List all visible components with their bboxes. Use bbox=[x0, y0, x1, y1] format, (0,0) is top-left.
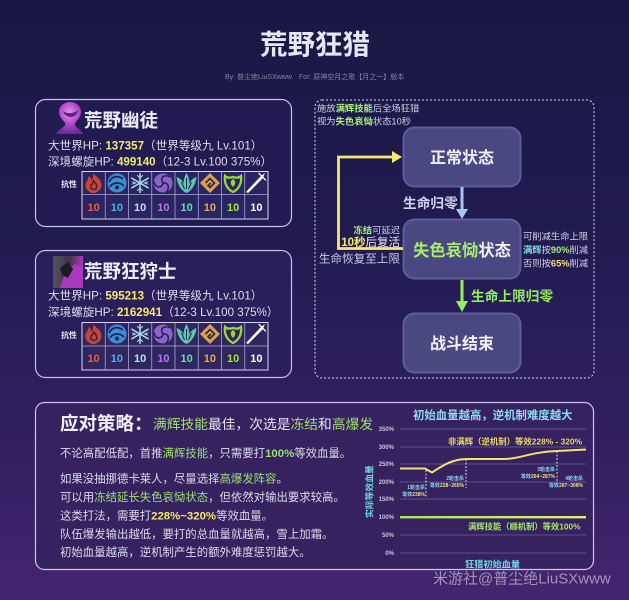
table: resistances bbox=[82, 322, 268, 370]
arrow: normal to despair bbox=[456, 187, 468, 219]
label: round 2: 2轮击杀 bbox=[446, 475, 464, 482]
heading: 应对策略: 应对策略： bbox=[60, 413, 153, 434]
resistance values: 10 bbox=[111, 353, 123, 365]
y axis ticks: 250% bbox=[379, 462, 395, 468]
panel: boss 荒野幽徒 bbox=[36, 100, 292, 226]
icon: pyro bbox=[85, 324, 102, 344]
label: 非满辉: 非满辉（逆机制）等效228% - 320% bbox=[448, 436, 583, 446]
resistance values: 10 bbox=[157, 353, 170, 365]
icon: electro bbox=[154, 324, 172, 344]
text: skill note: 施放满辉技能后全场狂猎 bbox=[317, 102, 419, 114]
y axis ticks: 150% bbox=[379, 497, 395, 503]
text: strategy paragraph: 可以用冻结延长失色哀恸状态，但依然对输出要求较高。 bbox=[60, 490, 345, 504]
label: round 2: 等效228~265% bbox=[430, 482, 465, 489]
y axis ticks bbox=[379, 427, 395, 557]
resistance values bbox=[87, 353, 263, 365]
label: round 4 bbox=[549, 475, 584, 489]
x axis label: 狂猎初始血量 bbox=[465, 558, 520, 570]
label: round 1: 等效238% bbox=[402, 491, 426, 498]
text: reduction notes: 可削减生命上限 bbox=[523, 230, 588, 242]
icon: physical bbox=[246, 324, 266, 344]
y axis ticks: 300% bbox=[379, 445, 395, 451]
icon: physical bbox=[246, 173, 266, 193]
y axis label: 实际等效血量 bbox=[364, 465, 374, 518]
resistance values: 10 bbox=[87, 202, 100, 214]
label: 生命上限归零: 生命上限归零 bbox=[471, 288, 553, 304]
resistance values: 10 bbox=[180, 202, 193, 214]
text: strategy paragraph: 如果没抽挪德卡莱人，尽量选择高爆发阵容。 bbox=[60, 472, 288, 486]
icon: 荒野狂狩士 portrait bbox=[53, 256, 83, 288]
box: 失色哀恸状态: 失色哀恸状态 bbox=[413, 241, 511, 260]
box: 战斗结束: 战斗结束 bbox=[430, 335, 494, 353]
resistance values: 10 bbox=[180, 353, 193, 365]
text: 深境螺旋HP: 深境螺旋HP: 2162941（12-3 Lv.100 375%） bbox=[48, 305, 279, 319]
y axis ticks: 100% bbox=[379, 515, 395, 521]
panel: state flow bbox=[315, 100, 594, 378]
icon: hydro bbox=[108, 174, 126, 192]
chart title: 初始血量越高，逆机制难度越大 bbox=[413, 408, 573, 422]
y axis ticks: 50% bbox=[382, 533, 395, 539]
icon: geo bbox=[200, 324, 220, 344]
box: 战斗结束 bbox=[404, 314, 520, 372]
text: strategy paragraph: 这类打法，需要打228%~320%等效血量。 bbox=[60, 508, 273, 522]
y axis ticks: 200% bbox=[379, 480, 395, 486]
resistance values: 10 bbox=[134, 202, 146, 214]
icon: cryo bbox=[132, 174, 148, 192]
resistance values: 10 bbox=[204, 353, 216, 365]
text: strategy paragraph bbox=[60, 472, 345, 559]
y axis ticks: 350% bbox=[379, 427, 395, 433]
label: round 2 bbox=[430, 475, 465, 489]
resistance values: 10 bbox=[134, 353, 146, 365]
resistance values: 10 bbox=[157, 202, 170, 214]
heading: 荒野幽徒: 荒野幽徒 bbox=[84, 110, 159, 131]
box: 正常状态 bbox=[404, 128, 520, 186]
label: 抗性: 抗性 bbox=[61, 330, 77, 340]
text: state note: 视为失色哀恸状态10秒 bbox=[317, 116, 411, 126]
box: 正常状态: 正常状态 bbox=[430, 148, 494, 167]
label: 抗性: 抗性 bbox=[61, 179, 77, 189]
line: 满辉 bbox=[400, 516, 586, 518]
icon: hydro bbox=[108, 324, 126, 344]
chart: equivalent HP bbox=[364, 408, 586, 570]
label: round 3: 等效264~287% bbox=[521, 473, 556, 480]
text: reduction notes: 否则按65%削减 bbox=[523, 258, 589, 268]
line: 非满辉 bbox=[400, 450, 586, 472]
box: 失色哀恸状态 bbox=[404, 220, 520, 278]
subtitle: author and version: By: 普尘绝LiuSXwww For: 原神空月之歌【月之一】版本 bbox=[225, 72, 404, 81]
text: reduction notes: 满辉按90%削减 bbox=[523, 244, 589, 255]
text: strategy paragraph: 初始血量越高，逆机制产生的额外难度惩罚越大。 bbox=[60, 545, 311, 559]
icon: dendro bbox=[225, 327, 241, 343]
text: strategy paragraph: 队伍爆发输出越低，要打的总血量就越高，雪上加霜。 bbox=[60, 527, 333, 541]
watermark: 米游社@普尘绝LiuSXwww bbox=[433, 570, 611, 588]
title: 荒野狂猎 bbox=[260, 29, 370, 60]
label: round 1: 1轮击杀 bbox=[407, 484, 425, 491]
icon: electro bbox=[154, 174, 172, 192]
icon: cryo bbox=[132, 324, 148, 344]
text: reduction notes bbox=[523, 230, 589, 268]
resistance values: 10 bbox=[227, 353, 239, 365]
label: 生命恢复至上限: 生命恢复至上限 bbox=[319, 252, 400, 266]
label: round 3: 3轮击杀 bbox=[537, 466, 555, 473]
icon: 荒野幽徒 portrait bbox=[56, 102, 83, 134]
label: round 4: 4轮击杀 bbox=[565, 475, 583, 482]
icon: geo bbox=[200, 173, 220, 193]
text: revive note: 10秒后复活 bbox=[341, 235, 400, 249]
resistance values: 10 bbox=[227, 202, 239, 214]
heading: 荒野狂狩士: 荒野狂狩士 bbox=[84, 261, 177, 282]
label: 生命归零: 生命归零 bbox=[403, 195, 458, 211]
resistance values: 10 bbox=[111, 202, 123, 214]
icon: pyro bbox=[85, 173, 102, 193]
text: 大世界HP: 大世界HP: 595213（世界等级九 Lv.101） bbox=[48, 288, 262, 302]
label: round 1 bbox=[402, 484, 426, 498]
resistance values: 10 bbox=[87, 353, 100, 365]
text: best choice: 满辉技能最佳，次选是冻结和高爆发 bbox=[153, 416, 373, 432]
arrow: revive loop bbox=[338, 151, 403, 248]
arrow: despair to end bbox=[456, 280, 468, 312]
text: strategy line 1: 不论高配低配，首推满辉技能，只需要打100%等效血量。 bbox=[60, 446, 351, 460]
icon: anemo bbox=[176, 173, 196, 193]
y axis ticks: 0% bbox=[385, 551, 395, 557]
label: 满辉: 满辉技能（顺机制）等效100% bbox=[468, 522, 581, 532]
resistance values: 10 bbox=[204, 202, 216, 214]
label: round 3 bbox=[521, 466, 556, 480]
resistance values: 10 bbox=[250, 353, 263, 365]
table: resistances bbox=[82, 172, 268, 219]
panel: boss 荒野狂狩士 bbox=[36, 250, 292, 378]
resistance values bbox=[87, 202, 263, 214]
text: 深境螺旋HP: 深境螺旋HP: 499140（12-3 Lv.100 375%） bbox=[48, 154, 272, 168]
panel: strategy bbox=[36, 402, 594, 570]
text: freeze note: 冻结可延迟 bbox=[353, 224, 400, 236]
label: round 4: 等效287~308% bbox=[549, 482, 584, 489]
icon: anemo bbox=[176, 324, 196, 344]
text: 大世界HP: 大世界HP: 137357（世界等级九 Lv.101） bbox=[48, 138, 262, 152]
icon: dendro bbox=[225, 176, 241, 192]
resistance values: 10 bbox=[250, 202, 263, 214]
